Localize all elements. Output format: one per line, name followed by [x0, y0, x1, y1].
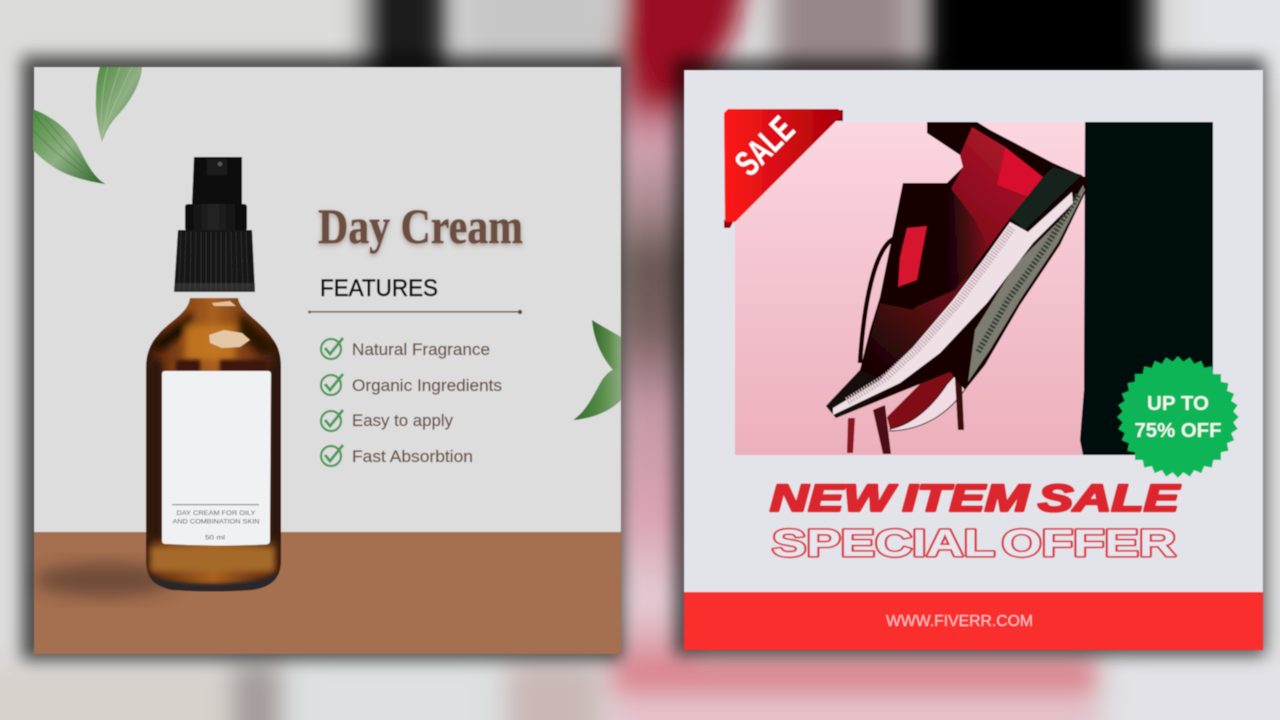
feature: natural fragrance: Natural Fragrance	[352, 341, 490, 359]
heading: features: FEATURES	[320, 275, 438, 302]
panel background	[684, 70, 1263, 650]
badge: up to 75% off	[1117, 356, 1239, 478]
black saddle shading	[880, 183, 990, 308]
worn sole tread	[968, 185, 1085, 382]
feature: organic ingredients: Organic Ingredients	[352, 377, 502, 395]
badge: up to 75% off: 75% OFF	[1134, 420, 1222, 442]
heel patch	[997, 147, 1043, 197]
feature: fast absorbtion	[321, 445, 473, 466]
badge: up to 75% off: UP TO	[1147, 393, 1209, 415]
ribbon: sale: SALE	[727, 108, 802, 184]
white midsole	[833, 192, 1073, 415]
bottle shadow	[35, 563, 175, 597]
lace panel	[898, 226, 927, 287]
spray nozzle	[192, 157, 242, 204]
feature: fast absorbtion: Fast Absorbtion	[352, 448, 473, 466]
feature: organic ingredients	[321, 374, 502, 395]
icon: top leaf	[96, 67, 142, 142]
panel: new item sale	[684, 70, 1263, 650]
dark trousers	[1080, 122, 1213, 455]
red knit upper	[864, 127, 1028, 378]
headline: special offer: SPECIAL OFFER	[772, 523, 1176, 565]
dark toe cap	[826, 370, 900, 418]
ribbon: sale	[724, 108, 843, 228]
panel background	[34, 67, 621, 532]
photo backdrop	[735, 122, 1085, 455]
wooden ground	[34, 532, 621, 654]
feature list	[321, 338, 502, 466]
footer band	[684, 592, 1263, 650]
website address: WWW.FIVERR.COM	[886, 613, 1033, 630]
headline: new item sale: NEW ITEM SALE	[770, 478, 1181, 520]
collar	[185, 204, 247, 231]
icon: right leaves	[573, 320, 621, 420]
bottle	[146, 157, 281, 595]
amber glass body	[146, 298, 281, 592]
bottle label: AND COMBINATION SKIN	[172, 518, 260, 526]
bottle label: 50 ml	[205, 534, 226, 542]
divider line	[308, 310, 522, 314]
bottle highlight	[209, 330, 250, 348]
icon: left leaf	[33, 109, 105, 184]
laces	[860, 239, 893, 363]
shoe photo	[826, 122, 1088, 454]
feature: natural fragrance	[321, 338, 490, 359]
heel block	[1010, 167, 1082, 230]
far shoe	[847, 343, 968, 454]
bottle label	[162, 371, 271, 546]
feature: easy to apply	[321, 410, 454, 431]
shoe silhouette	[826, 122, 1088, 418]
feature: easy to apply: Easy to apply	[352, 412, 454, 430]
panel: day cream	[33, 67, 621, 654]
ribbed cap	[174, 230, 255, 292]
bottle label: DAY CREAM FOR OILY	[176, 510, 256, 517]
glass reflections	[148, 312, 280, 595]
heading: Day Cream: Day Cream	[318, 198, 523, 254]
